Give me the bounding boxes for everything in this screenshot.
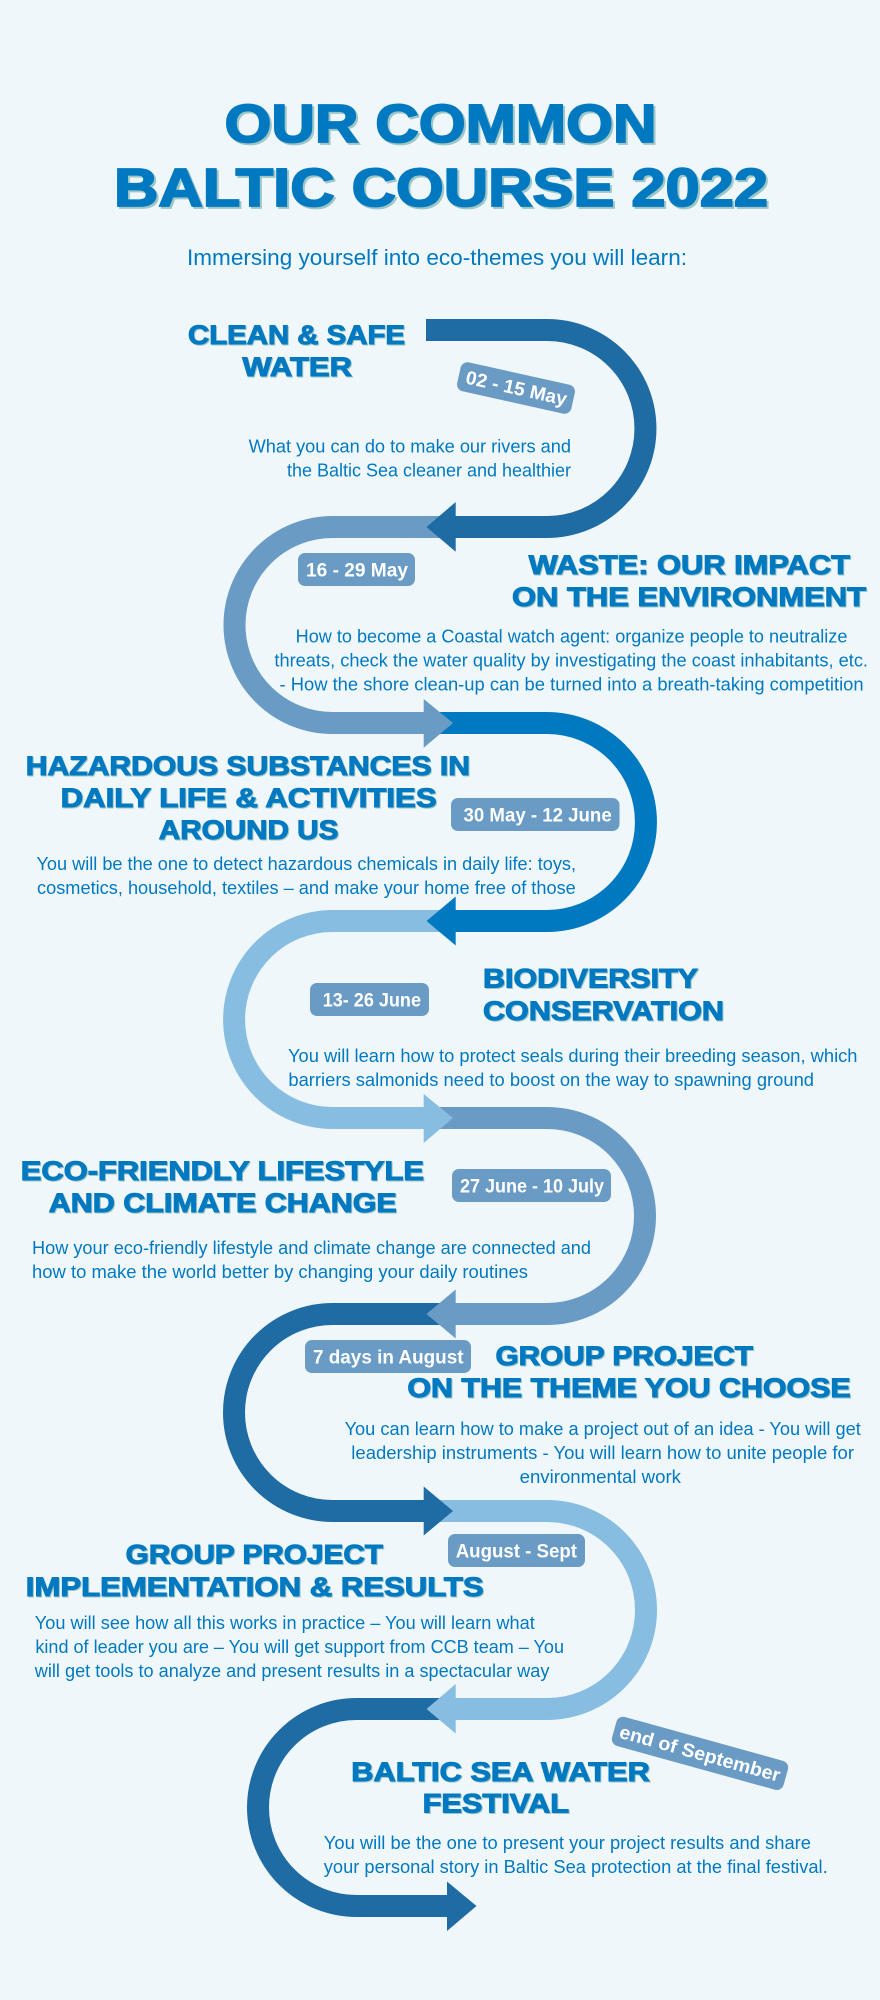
heading: eco-friendly lifestyle: ECO-FRIENDLY LIFESTYLE bbox=[21, 1156, 424, 1186]
text: biodiversity: barriers salmonids need to boost on the way to spawning ground bbox=[288, 1070, 814, 1090]
text: hazardous substances bbox=[36, 854, 576, 898]
date badge: 27 June - 10 July bbox=[452, 1169, 611, 1202]
heading: baltic sea water festival: FESTIVAL bbox=[423, 1789, 569, 1819]
heading: hazardous substances bbox=[26, 751, 470, 845]
date badge: 30 May - 12 June bbox=[451, 798, 620, 831]
text: group project theme: environmental work bbox=[520, 1467, 682, 1487]
text: group project implementation: You will see how all this works in practice – You will learn what bbox=[35, 1613, 535, 1633]
text: group project theme bbox=[345, 1419, 861, 1487]
title: BALTIC COURSE 2022 bbox=[114, 158, 768, 218]
heading: group project theme bbox=[407, 1341, 851, 1403]
date badge: 13- 26 June bbox=[310, 983, 429, 1016]
text: waste: threats, check the water quality by investigating the coast inhabitants, etc. bbox=[274, 651, 868, 671]
date badge: 13- 26 June: 13- 26 June bbox=[323, 990, 421, 1012]
heading: group project theme: GROUP PROJECT bbox=[496, 1341, 754, 1371]
heading: clean and safe water: WATER bbox=[242, 352, 352, 382]
subtitle: Immersing yourself into eco-themes you will learn: bbox=[187, 245, 687, 270]
heading: hazardous substances: DAILY LIFE & ACTIVITIES bbox=[61, 783, 437, 813]
text: clean and safe water bbox=[249, 437, 571, 481]
heading: biodiversity bbox=[483, 964, 724, 1026]
date badge: August - Sept bbox=[448, 1534, 585, 1567]
heading: group project implementation bbox=[26, 1540, 484, 1602]
text: clean and safe water: the Baltic Sea cleaner and healthier bbox=[287, 461, 571, 481]
arrow: path segment 4 bbox=[234, 921, 453, 1143]
arrow: path segment 1 bbox=[426, 330, 645, 552]
heading: waste: ON THE ENVIRONMENT bbox=[512, 582, 867, 612]
heading: waste bbox=[512, 550, 867, 612]
heading: hazardous substances: HAZARDOUS SUBSTANCES IN bbox=[26, 751, 470, 781]
text: eco-friendly lifestyle: How your eco-friendly lifestyle and climate change are connected and bbox=[32, 1238, 591, 1258]
text: baltic sea water festival bbox=[324, 1833, 828, 1877]
date badge: August - Sept: August - Sept bbox=[456, 1542, 578, 1562]
text: clean and safe water: What you can do to make our rivers and bbox=[249, 437, 571, 457]
date badge: 7 days in August bbox=[305, 1340, 471, 1373]
date badge: 27 June - 10 July: 27 June - 10 July bbox=[460, 1176, 604, 1198]
text: waste: How to become a Coastal watch agent: organize people to neutralize bbox=[296, 627, 847, 647]
text: biodiversity bbox=[288, 1046, 858, 1090]
heading: group project theme: ON THE THEME YOU CHOOSE bbox=[407, 1373, 851, 1403]
arrow: path segment 5 bbox=[426, 1118, 645, 1338]
arrow: path segment 8 bbox=[258, 1709, 477, 1931]
text: baltic sea water festival: You will be the one to present your project results and share bbox=[324, 1833, 811, 1853]
arrow: path segment 2 bbox=[234, 527, 453, 748]
heading: group project implementation: IMPLEMENTATION & RESULTS bbox=[26, 1572, 484, 1602]
title bbox=[114, 94, 768, 218]
date badge: 16 - 29 May bbox=[298, 553, 415, 586]
date badge: 7 days in August: 7 days in August bbox=[313, 1348, 464, 1368]
heading: hazardous substances: AROUND US bbox=[159, 815, 338, 845]
heading: eco-friendly lifestyle bbox=[21, 1156, 424, 1218]
heading: biodiversity: BIODIVERSITY bbox=[483, 964, 698, 994]
date badge: 02 - 15 May: 02 - 15 May bbox=[464, 368, 569, 411]
text: biodiversity: You will learn how to protect seals during their breeding season, which bbox=[288, 1046, 858, 1066]
date badge: end of September: end of September bbox=[617, 1722, 783, 1787]
text: group project implementation: will get tools to analyze and present results in a spectacular way bbox=[34, 1661, 549, 1681]
title: OUR COMMON bbox=[224, 94, 656, 154]
text: baltic sea water festival: your personal story in Baltic Sea protection at the final festival. bbox=[324, 1857, 828, 1877]
arrow: path segment 7 bbox=[426, 1511, 646, 1734]
date badge: 02 - 15 May bbox=[456, 361, 576, 415]
text: group project implementation: kind of leader you are – You will get support from CCB team – You bbox=[35, 1637, 564, 1657]
text: waste: - How the shore clean-up can be turned into a breath-taking competition bbox=[280, 675, 864, 695]
text: hazardous substances: cosmetics, household, textiles – and make your home free of those bbox=[37, 878, 576, 898]
text: group project theme: You can learn how to make a project out of an idea - You will get bbox=[345, 1419, 861, 1439]
text: group project implementation bbox=[34, 1613, 564, 1681]
text: eco-friendly lifestyle: how to make the world better by changing your daily routines bbox=[32, 1262, 528, 1282]
text: hazardous substances: You will be the one to detect hazardous chemicals in daily life: toys, bbox=[36, 854, 576, 874]
arrow: path segment 6 bbox=[234, 1314, 453, 1536]
heading: clean and safe water bbox=[188, 320, 405, 382]
heading: biodiversity: CONSERVATION bbox=[483, 996, 724, 1026]
heading: group project implementation: GROUP PROJECT bbox=[126, 1540, 384, 1570]
heading: clean and safe water: CLEAN & SAFE bbox=[188, 320, 405, 350]
date badge: 16 - 29 May: 16 - 29 May bbox=[306, 560, 408, 582]
heading: baltic sea water festival: BALTIC SEA WATER bbox=[351, 1757, 650, 1787]
heading: eco-friendly lifestyle: AND CLIMATE CHANGE bbox=[49, 1188, 397, 1218]
text: waste bbox=[274, 627, 868, 695]
text: group project theme: leadership instruments - You will learn how to unite people for bbox=[351, 1443, 854, 1463]
date badge: 30 May - 12 June: 30 May - 12 June bbox=[464, 806, 612, 826]
text: eco-friendly lifestyle bbox=[32, 1238, 591, 1282]
heading: baltic sea water festival bbox=[351, 1757, 650, 1819]
heading: waste: WASTE: OUR IMPACT bbox=[529, 550, 851, 580]
arrow: path segment 3 bbox=[426, 723, 646, 946]
